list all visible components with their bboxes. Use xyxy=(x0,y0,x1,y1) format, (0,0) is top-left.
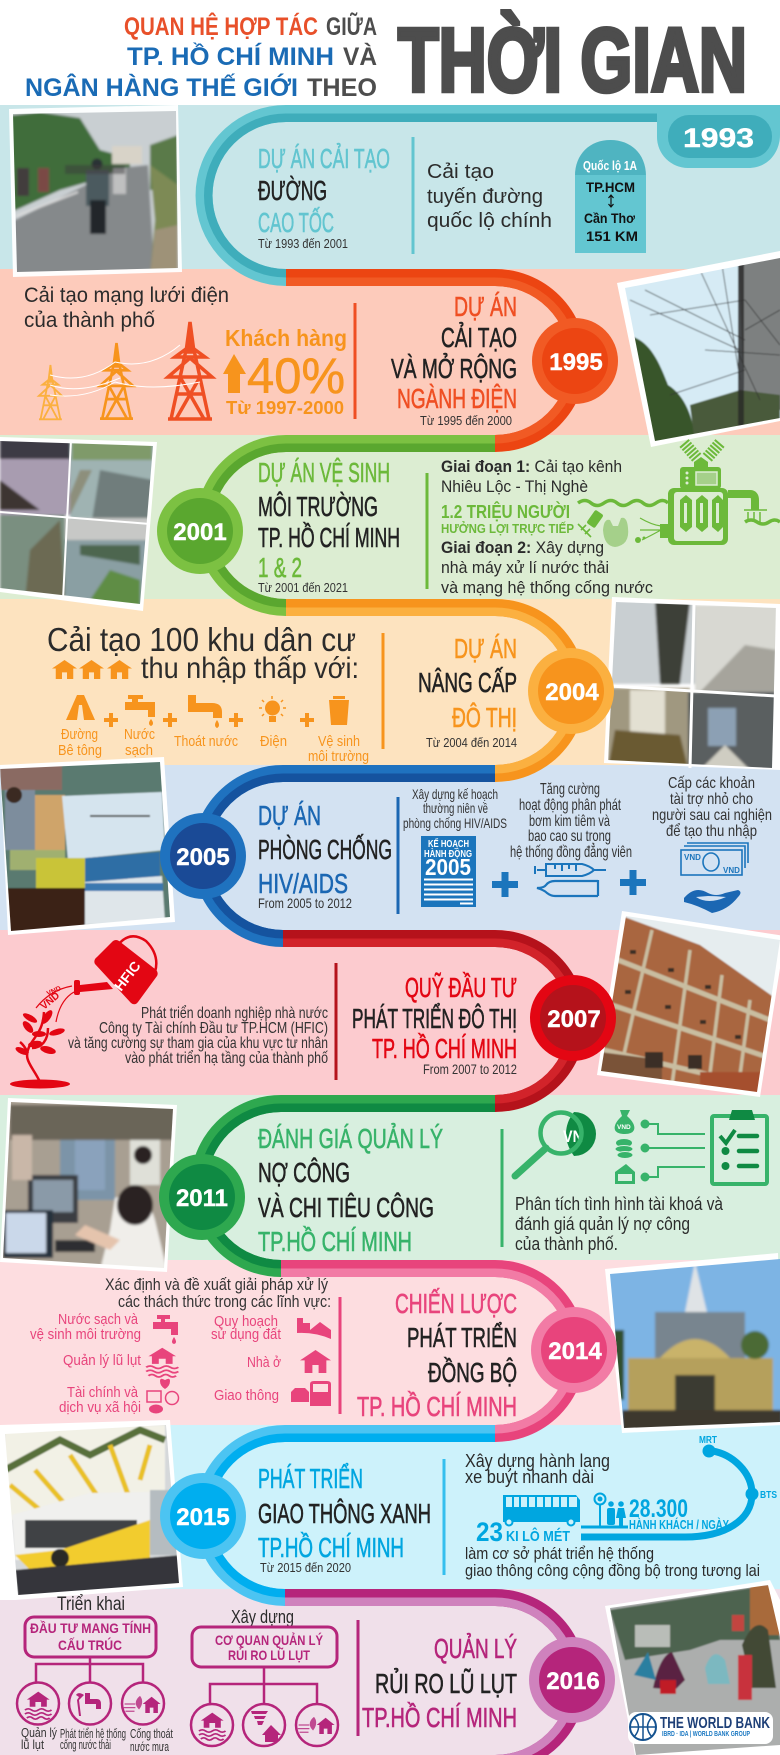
topic labels xyxy=(30,1311,282,1416)
topic labels: Nhà ở xyxy=(247,1354,281,1371)
icon: HFIC watering can and plant xyxy=(10,936,158,1088)
icon: BRT route line xyxy=(581,1444,758,1537)
icon: HFIC watering can and plant: VND xyxy=(46,985,62,998)
heading: From 2007 to 2012 xyxy=(423,1061,517,1077)
box: structural investment: ĐẦU TƯ MANG TÍNH xyxy=(30,1620,151,1636)
heading: CHIẾN LƯỢC xyxy=(395,1288,517,1319)
heading: ĐỒNG BỘ xyxy=(428,1357,517,1388)
description: của thành phố xyxy=(24,309,155,332)
icon captions: nước mưa xyxy=(130,1739,169,1754)
icon labels: Thoát nước xyxy=(174,733,238,750)
divider xyxy=(354,303,356,419)
heading xyxy=(258,142,390,251)
description: Giai đoạn 2: Xây dựng xyxy=(441,538,604,557)
plus xyxy=(492,872,518,897)
heading: ĐÔ THỊ xyxy=(452,702,517,733)
panel: 2016 flood risk management xyxy=(17,1580,780,1755)
description: nhà máy xử lí nước thải xyxy=(441,558,609,577)
heading: DỰ ÁN xyxy=(454,291,517,322)
description: needles and condoms: hệ thống đồng đẳng viên xyxy=(510,842,632,861)
icon: action plan document: HÀNH ĐỘNG xyxy=(424,847,472,860)
icon: HFIC watering can and plant: HFIC xyxy=(111,958,144,994)
structural investment tree xyxy=(17,1594,173,1754)
route labels: BTS xyxy=(760,1490,777,1501)
topic labels: Nước sạch và xyxy=(58,1311,139,1328)
stat: 23 km: 23 xyxy=(476,1517,503,1547)
heading: TP. HỒ CHÍ MINH xyxy=(372,1033,517,1064)
description xyxy=(465,1451,760,1580)
heading: NGÀNH ĐIỆN xyxy=(397,383,517,414)
header title: THEO xyxy=(307,74,377,102)
heading: DỰ ÁN xyxy=(454,633,517,664)
icon captions xyxy=(21,1725,173,1754)
divider xyxy=(338,1297,342,1414)
icon: action plan document: 2005 xyxy=(425,854,471,880)
description: Cải tạo xyxy=(427,161,494,183)
topic labels: Quản lý lũ lụt xyxy=(63,1352,142,1369)
heading: DỰ ÁN VỆ SINH xyxy=(258,457,390,488)
divider xyxy=(426,473,428,589)
panel: 2011 public debt assessment xyxy=(0,1098,767,1273)
divider xyxy=(412,137,414,254)
heading xyxy=(391,291,517,428)
description: Phân tích tình hình tài khoá và xyxy=(515,1194,724,1214)
year badge 1995: 1995 xyxy=(549,349,603,376)
description xyxy=(515,1194,724,1254)
panel: 2005 HIV/AIDS project xyxy=(0,757,772,938)
icon: syringe and condom xyxy=(535,864,606,896)
heading: QUỸ ĐẦU TƯ xyxy=(405,972,517,1003)
description: action plan: Xây dựng kế hoạch xyxy=(412,786,498,802)
icon: three houses xyxy=(52,660,132,679)
heading: ĐƯỜNG xyxy=(258,175,327,206)
heading: PHÁT TRIỂN xyxy=(407,1322,517,1353)
description: xe buýt nhanh dài xyxy=(465,1467,594,1487)
topic labels: Quy hoạch xyxy=(214,1313,278,1330)
heading: ĐÁNH GIÁ QUẢN LÝ xyxy=(258,1122,443,1154)
heading xyxy=(258,457,400,595)
icons: money bag, coins, cash house: VND xyxy=(617,1124,631,1131)
description: Xây dựng hành lang xyxy=(465,1451,610,1471)
description: Giai đoạn 1: Cải tạo kênh xyxy=(441,457,622,476)
icon labels xyxy=(58,726,369,765)
heading: Từ 2015 đến 2020 xyxy=(260,1560,351,1575)
photo: flooded street xyxy=(605,1580,780,1755)
icon: banknotes and hand xyxy=(681,843,748,913)
icon: banknotes and hand: VND xyxy=(684,853,701,862)
icon labels: Điện xyxy=(260,733,287,750)
photo: canal before and after xyxy=(0,437,157,611)
icon: water treatment machine xyxy=(578,443,780,547)
photo: office staff xyxy=(0,1098,180,1273)
icon: HFIC watering can and plant: VND xyxy=(39,990,62,1012)
year badge 2011 xyxy=(159,1154,245,1240)
logo: The World Bank xyxy=(628,1712,773,1744)
heading: NỢ CÔNG xyxy=(258,1157,350,1188)
panel: 2015 green transport xyxy=(0,1420,777,1600)
topic labels: vệ sinh môi trường xyxy=(30,1326,141,1343)
icons: money bag, coins, cash house xyxy=(615,1110,635,1184)
panel: 1995 electricity project xyxy=(24,250,780,447)
heading xyxy=(258,1122,443,1257)
heading: GIAO THÔNG XANH xyxy=(258,1498,431,1529)
box: flood management agency: RỦI RO LŨ LỤT xyxy=(228,1646,310,1663)
stat: 28.300 passengers per day xyxy=(629,1495,729,1532)
description xyxy=(24,284,229,332)
logo: The World Bank: IBRD · IDA | WORLD BANK GROUP xyxy=(662,1731,750,1738)
icon: clipboard checklist xyxy=(712,1110,767,1184)
stat: 23 km xyxy=(476,1517,570,1547)
heading: VÀ MỞ RỘNG xyxy=(391,352,517,384)
description xyxy=(68,1004,328,1067)
icon: action plan document xyxy=(421,836,476,907)
icons: road, tap, drain, bulb, bin xyxy=(66,695,349,728)
year badge 2016: 2016 xyxy=(546,1668,600,1695)
heading: TP.HỒ CHÍ MINH xyxy=(362,1702,517,1733)
description: action plan: phòng chống HIV/AIDS xyxy=(403,815,507,831)
description: needles and condoms: Tăng cường xyxy=(540,781,600,798)
year badge 2014: 2014 xyxy=(548,1338,602,1365)
divider xyxy=(396,797,400,914)
year badge 2001: 2001 xyxy=(173,519,227,546)
year badge 2007: 2007 xyxy=(547,1006,601,1033)
icon: magnifier over VND coin: VN xyxy=(563,1127,583,1146)
road sign: Quốc lộ 1A: Cần Thơ xyxy=(584,210,635,226)
heading: Từ 1993 đến 2001 xyxy=(258,236,348,251)
topic labels: dịch vụ xã hội xyxy=(59,1399,141,1416)
road sign: Quốc lộ 1A xyxy=(575,140,646,253)
panel: 2014 synchronized development strategy xyxy=(30,1253,780,1435)
heading: PHÒNG CHỐNG xyxy=(258,833,392,865)
box: structural investment: CẤU TRÚC xyxy=(58,1636,122,1653)
year badge 2015 xyxy=(160,1473,246,1559)
icon: magnifier over VND coin xyxy=(515,1112,596,1176)
heading: From 2005 to 2012 xyxy=(258,895,352,911)
icon labels: Bê tông xyxy=(58,742,102,759)
photo: overhead wires xyxy=(610,250,780,447)
description: và tăng cường sự tham gia của khu vực tư nhân xyxy=(68,1035,328,1052)
icon: bus stop and passengers xyxy=(594,1494,626,1526)
topic labels: Tài chính và xyxy=(67,1384,139,1401)
description xyxy=(47,621,359,685)
road sign: Quốc lộ 1A: Quốc lộ 1A xyxy=(583,158,637,173)
year badge 2005: 2005 xyxy=(176,844,230,871)
description: action plan: thường niên về xyxy=(423,800,488,816)
connector xyxy=(36,1657,143,1682)
photo: alleys before and after xyxy=(604,597,780,770)
photo: BRT bus at station xyxy=(0,1420,185,1600)
description xyxy=(427,161,552,232)
header title xyxy=(25,10,747,111)
year badge 2007 xyxy=(530,975,616,1061)
panel: 2001 sanitation project xyxy=(0,437,780,611)
panel: 2007 urban development fund xyxy=(10,905,780,1102)
photo: motorbikes on highway xyxy=(5,105,185,280)
stat: customers up 40% xyxy=(223,325,347,418)
description: Công ty Tài chính Đầu tư TP.HCM (HFIC) xyxy=(99,1020,328,1037)
heading: VÀ CHI TIÊU CÔNG xyxy=(258,1192,434,1223)
topic icons xyxy=(146,1315,331,1414)
year badge 1995 xyxy=(532,318,618,404)
icon captions: cống nước thải xyxy=(60,1737,111,1752)
heading: RỦI RO LŨ LỤT xyxy=(375,1667,517,1699)
heading: PHÁT TRIỂN xyxy=(258,1463,363,1494)
year badge 2004: 2004 xyxy=(545,679,599,706)
topic labels: sử dụng đất xyxy=(211,1326,282,1343)
timeline ribbon xyxy=(198,114,690,1755)
heading: TP.HỒ CHÍ MINH xyxy=(258,1532,404,1563)
heading: Từ 1995 đến 2000 xyxy=(420,413,512,428)
icon labels: Vệ sinh xyxy=(318,733,360,750)
stat: customers up 40%: 40% xyxy=(247,348,345,404)
icon labels: sạch xyxy=(125,742,153,759)
heading xyxy=(357,1288,517,1422)
route labels: MRT xyxy=(699,1435,717,1446)
heading: Từ 2004 đến 2014 xyxy=(426,735,517,750)
heading: CẢI TẠO xyxy=(441,321,517,353)
heading: DỰ ÁN xyxy=(258,800,321,831)
heading xyxy=(258,1463,431,1575)
icon labels: Đường xyxy=(61,726,98,743)
description: của thành phố. xyxy=(515,1234,618,1254)
heading xyxy=(418,633,517,750)
heading xyxy=(362,1632,517,1733)
plus xyxy=(620,870,646,895)
year badge 2005 xyxy=(160,813,246,899)
description: needles and condoms: bao cao su trong xyxy=(528,828,611,845)
stat: 28.300 passengers per day: HÀNH KHÁCH / NGÀY xyxy=(629,1517,729,1532)
description xyxy=(441,457,653,597)
heading: TP.HỒ CHÍ MINH xyxy=(258,1226,412,1257)
icon labels: môi trường xyxy=(308,748,369,765)
icons: flood, storm, drain xyxy=(191,1704,338,1746)
description: Nhiêu Lộc - Thị Nghè xyxy=(441,477,588,496)
photo: brick building xyxy=(595,905,780,1102)
route labels xyxy=(699,1435,777,1501)
icon: bus xyxy=(503,1495,580,1526)
icon: action plan document: KẾ HOẠCH xyxy=(428,837,469,850)
road sign: Quốc lộ 1A: 151 KM xyxy=(586,228,638,244)
description: needles and condoms: bơm kim tiêm và xyxy=(529,813,610,830)
heading: Từ 2001 đến 2021 xyxy=(258,580,348,595)
description: Xác định và đề xuất giải pháp xử lý xyxy=(105,1275,328,1294)
heading: NÂNG CẤP xyxy=(418,667,517,698)
stat: 23 km: KI LÔ MÉT xyxy=(506,1527,570,1545)
stat: customers up 40%: Từ 1997-2000 xyxy=(226,398,344,418)
photo: friendly pharmacy xyxy=(0,757,175,938)
description: needles and condoms xyxy=(510,781,632,861)
description: needles and condoms: hoạt động phân phát xyxy=(519,797,621,814)
year badge 2011: 2011 xyxy=(176,1185,228,1212)
divider xyxy=(334,963,338,1080)
photo: Bitexco tower and city hall xyxy=(605,1253,780,1435)
header title: GIỮA xyxy=(326,11,377,41)
heading: CAO TỐC xyxy=(258,206,334,238)
heading: 1 & 2 xyxy=(258,552,302,583)
icons: flood, pipes, drain xyxy=(17,1682,164,1724)
icon captions: Quản lý xyxy=(21,1725,57,1740)
stat: customers up 40%: Khách hàng xyxy=(225,325,347,351)
year badge 1993: 1993 xyxy=(683,123,754,153)
heading: QUẢN LÝ xyxy=(434,1632,517,1664)
header title: NGÂN HÀNG THẾ GIỚI xyxy=(25,72,298,102)
year badge 2016 xyxy=(529,1637,615,1723)
description: small grants xyxy=(652,775,772,840)
heading xyxy=(258,800,392,911)
box: structural investment xyxy=(25,1617,156,1657)
connector lines xyxy=(642,1120,705,1180)
road sign: Quốc lộ 1A: TP.HCM xyxy=(586,179,635,195)
description: Cải tạo mạng lưới điện xyxy=(24,284,229,307)
description: HƯỞNG LỢI TRỰC TIẾP xyxy=(441,521,574,536)
description: thu nhập thấp với: xyxy=(141,652,359,685)
icon labels: Nước xyxy=(124,726,155,743)
year badge 1993 xyxy=(657,105,780,168)
description: 1.2 TRIỆU NGƯỜI xyxy=(441,501,570,522)
panel: 1993 road project xyxy=(5,105,780,280)
description: action plan xyxy=(403,786,507,831)
icon: power towers xyxy=(39,322,212,419)
heading: PHÁT TRIỂN ĐÔ THỊ xyxy=(352,1003,517,1034)
heading: MÔI TRƯỜNG xyxy=(258,491,378,522)
description: đánh giá quản lý nợ công xyxy=(515,1214,690,1234)
icon captions: Phát triển hệ thống xyxy=(60,1726,126,1741)
box: flood management agency xyxy=(192,1627,337,1667)
heading: DỰ ÁN CẢI TẠO xyxy=(258,142,390,174)
topic labels: Giao thông xyxy=(214,1387,279,1404)
description: vào phát triển hạ tầng của thành phố xyxy=(125,1049,328,1067)
description xyxy=(105,1275,331,1311)
heading xyxy=(352,972,517,1077)
icon: banknotes and hand: VND xyxy=(723,866,740,875)
description: small grants: để tạo thu nhập xyxy=(666,822,757,840)
description: quốc lộ chính xyxy=(427,210,552,232)
header title: TP. HỒ CHÍ MINH xyxy=(127,41,334,71)
panel: 2004 urban upgrading xyxy=(47,597,780,770)
label: Xây dựng: Xây dựng xyxy=(231,1607,294,1627)
divider xyxy=(356,1620,360,1736)
year badge 2004 xyxy=(528,648,614,734)
description: các thách thức trong các lĩnh vực: xyxy=(118,1292,331,1311)
description: small grants: Cấp các khoản xyxy=(668,775,755,792)
year badge 2014 xyxy=(531,1307,617,1393)
connector xyxy=(210,1667,317,1703)
stat: 28.300 passengers per day: 28.300 xyxy=(629,1495,688,1523)
heading: TP. HỒ CHÍ MINH xyxy=(258,522,400,553)
heading: HIV/AIDS xyxy=(258,868,348,899)
divider xyxy=(442,1459,446,1575)
icon captions: Cống thoát xyxy=(130,1726,173,1741)
year badge 2015: 2015 xyxy=(176,1504,230,1531)
description: Phát triển doanh nghiệp nhà nước xyxy=(141,1004,328,1022)
icon captions: lũ lụt xyxy=(21,1737,44,1752)
description: tuyến đường xyxy=(427,186,543,208)
divider xyxy=(382,633,384,749)
flood agency tree xyxy=(191,1607,338,1746)
year badge 2001 xyxy=(157,488,243,574)
description: và mạng hệ thống cống nước xyxy=(441,578,653,597)
divider xyxy=(500,1129,504,1247)
header title: QUAN HỆ HỢP TÁC xyxy=(124,11,318,41)
heading: TP. HỒ CHÍ MINH xyxy=(357,1391,517,1422)
description: small grants: tài trợ nhỏ cho xyxy=(670,791,753,808)
label: Triển khai: Triển khai xyxy=(57,1594,125,1615)
description: làm cơ sở phát triển hệ thống xyxy=(465,1544,654,1563)
description: Cải tạo 100 khu dân cư xyxy=(47,621,356,658)
box: flood management agency: CƠ QUAN QUẢN LÝ xyxy=(215,1631,324,1648)
header title: VÀ xyxy=(343,42,377,71)
